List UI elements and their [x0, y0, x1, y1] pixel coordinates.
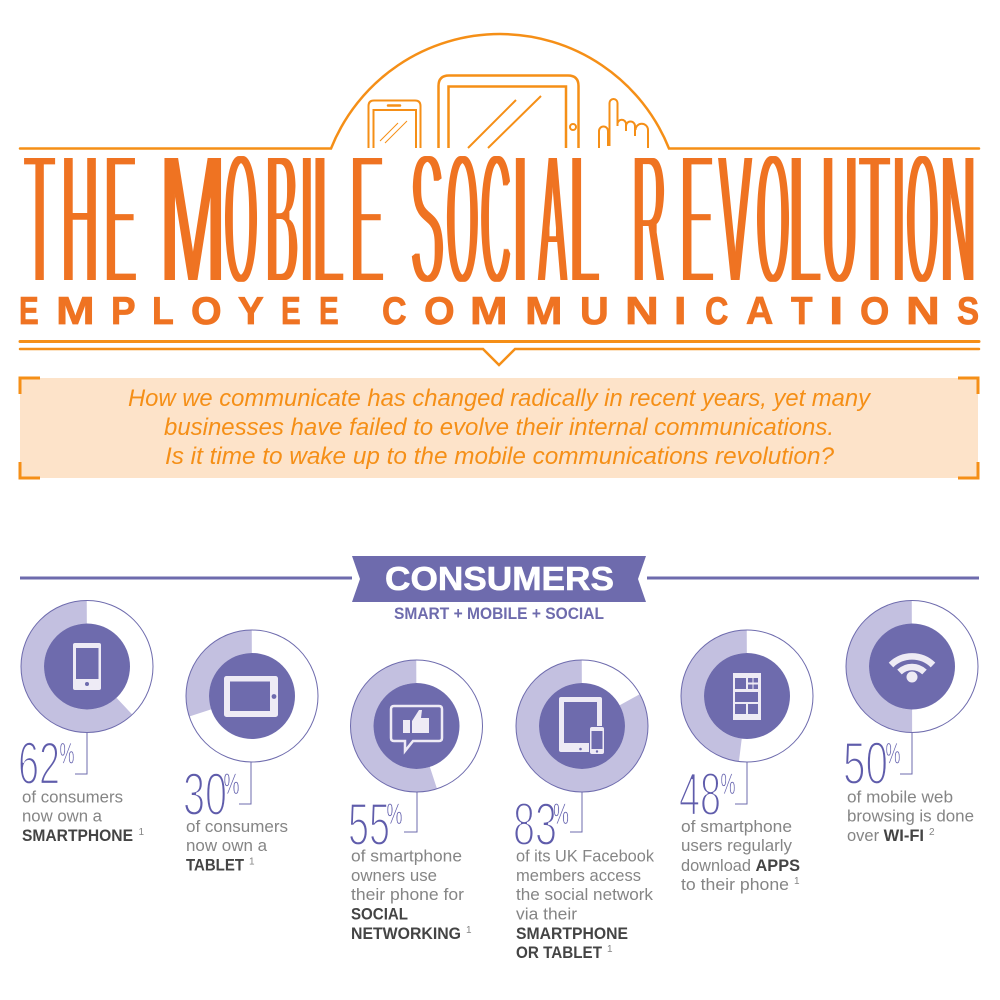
subtitle: A: [746, 290, 774, 333]
number 62 percent: 62: [18, 730, 60, 797]
text: social networking: SOCIAL: [351, 904, 408, 924]
text: apps: of smartphone: [681, 817, 792, 836]
number 83 percent: 83: [513, 791, 557, 858]
icon: pointing hand: [599, 99, 648, 148]
number 50 percent: %: [886, 738, 900, 770]
title: B: [266, 114, 298, 325]
title: I: [513, 114, 528, 325]
panel: intro: businesses have failed to evolve their internal communications.: [164, 414, 834, 441]
panel: intro: How we communicate has changed radically in recent years, yet many: [128, 385, 872, 412]
title: L: [570, 114, 599, 325]
number 55 percent: 55: [348, 791, 390, 858]
number 50 percent: 50: [843, 730, 888, 797]
text: facebook: the social network: [516, 885, 653, 904]
title: O: [757, 114, 789, 325]
subtitle: E: [281, 290, 301, 333]
number 55 percent: %: [386, 798, 402, 831]
text: wi-fi: 2: [929, 827, 935, 838]
subtitle: E: [19, 290, 39, 333]
text: social networking: owners use: [351, 866, 437, 885]
text: facebook: via their: [516, 904, 577, 924]
title: U: [822, 114, 857, 325]
title: S: [411, 114, 443, 325]
subtitle: O: [860, 290, 889, 333]
header arch line: [20, 34, 979, 149]
text: wi-fi: of mobile web: [847, 787, 953, 806]
heading: consumers banner: SMART + MOBILE + SOCIAL: [394, 604, 604, 623]
title: V: [719, 114, 751, 325]
subtitle: E: [319, 290, 339, 333]
title: E: [105, 114, 136, 325]
stat: facebook: [513, 660, 654, 962]
number 30 percent: 30: [183, 761, 227, 828]
text: apps: to their phone: [681, 875, 789, 894]
text: tablet: of consumers: [186, 817, 288, 836]
number 30 percent: %: [224, 768, 240, 801]
title: [24, 114, 976, 325]
icon: phone: [73, 643, 101, 690]
text: facebook: 1: [607, 944, 613, 955]
text: facebook: [516, 847, 654, 962]
text: tablet: 1: [249, 856, 255, 868]
text: wi-fi: [847, 787, 974, 845]
icon: tablet and phone: [559, 697, 605, 755]
text: tablet: TABLET: [186, 856, 245, 874]
subtitle: N: [625, 290, 659, 333]
icon: tablet: [224, 676, 278, 717]
title: O: [447, 114, 478, 325]
text: apps: 1: [794, 876, 800, 887]
stat: apps: [679, 630, 813, 894]
header lower rules with notch: [20, 342, 979, 365]
title: C: [481, 114, 511, 325]
title: O: [907, 114, 938, 325]
text: facebook: of its UK Facebook: [516, 847, 654, 866]
text: apps: [681, 817, 800, 894]
icon: like bubble: [391, 706, 442, 751]
title: M: [160, 114, 226, 325]
text: facebook: SMARTPHONE: [516, 924, 628, 943]
title: T: [860, 114, 889, 325]
title: R: [632, 114, 665, 325]
subtitle: O: [191, 290, 221, 333]
donut 62 percent: [21, 600, 153, 732]
title: I: [301, 114, 313, 325]
heading: consumers banner: [20, 556, 979, 623]
number 48 percent: %: [720, 768, 736, 801]
title: E: [681, 114, 713, 325]
title: N: [941, 114, 976, 325]
subtitle: P: [111, 290, 135, 333]
subtitle: I: [674, 290, 687, 333]
text: social networking: [351, 847, 472, 943]
subtitle: M: [470, 290, 508, 333]
number 83 percent: %: [553, 798, 569, 831]
text: social networking: their phone for: [351, 885, 464, 904]
icon: smartphone outline: [368, 100, 420, 148]
icon: wifi: [891, 656, 933, 682]
text: apps: download APPS: [681, 856, 800, 875]
text: smartphone: SMARTPHONE: [22, 826, 133, 845]
stat: social networking: [348, 660, 482, 943]
subtitle: T: [791, 290, 812, 333]
panel: intro: [20, 378, 978, 478]
title: I: [893, 114, 905, 325]
panel: intro: Is it time to wake up to the mobile communications revolution?: [165, 443, 835, 470]
title: H: [62, 114, 98, 325]
text: tablet: now own a: [186, 836, 268, 855]
subtitle: L: [152, 290, 174, 333]
stat: tablet: [183, 630, 318, 874]
subtitle: U: [580, 290, 608, 333]
text: smartphone: 1: [138, 827, 144, 838]
number 62 percent: %: [60, 738, 74, 770]
title: A: [539, 114, 566, 325]
subtitle: I: [829, 290, 843, 333]
title: O: [225, 114, 257, 325]
donut 55 percent: [350, 660, 482, 792]
stat: smartphone: [18, 600, 153, 845]
subtitle: C: [382, 290, 406, 333]
title: T: [25, 114, 54, 325]
subtitle: M: [56, 290, 95, 333]
text: smartphone: now own a: [22, 807, 103, 826]
donut 83 percent: [516, 660, 648, 792]
icon: tablet outline: [438, 76, 578, 148]
heading: consumers banner: CONSUMERS: [385, 561, 614, 598]
subtitle: C: [705, 290, 728, 333]
text: smartphone: [22, 787, 144, 845]
title: E: [351, 114, 383, 325]
title: L: [313, 114, 343, 325]
text: apps: users regularly: [681, 836, 792, 855]
subtitle: N: [906, 290, 940, 333]
subtitle: [19, 290, 979, 333]
icon: apps grid: [733, 673, 761, 720]
number 48 percent: 48: [679, 761, 721, 828]
donut 30 percent: [186, 630, 318, 762]
donut 50 percent: [846, 600, 978, 732]
subtitle: M: [525, 290, 563, 333]
text: smartphone: of consumers: [22, 787, 123, 806]
text: wi-fi: over WI-FI: [847, 826, 924, 845]
text: facebook: members access: [516, 866, 641, 885]
text: wi-fi: browsing is done: [847, 807, 974, 826]
subtitle: S: [957, 290, 979, 333]
stat: wi-fi: [843, 600, 978, 845]
text: tablet: [186, 817, 288, 874]
subtitle: O: [424, 290, 454, 333]
text: social networking: NETWORKING: [351, 924, 461, 943]
subtitle: Y: [238, 290, 264, 333]
donut 48 percent: [681, 630, 813, 762]
text: social networking: of smartphone: [351, 847, 462, 866]
title: L: [789, 114, 820, 325]
text: social networking: 1: [466, 925, 472, 936]
text: facebook: OR TABLET: [516, 943, 603, 962]
